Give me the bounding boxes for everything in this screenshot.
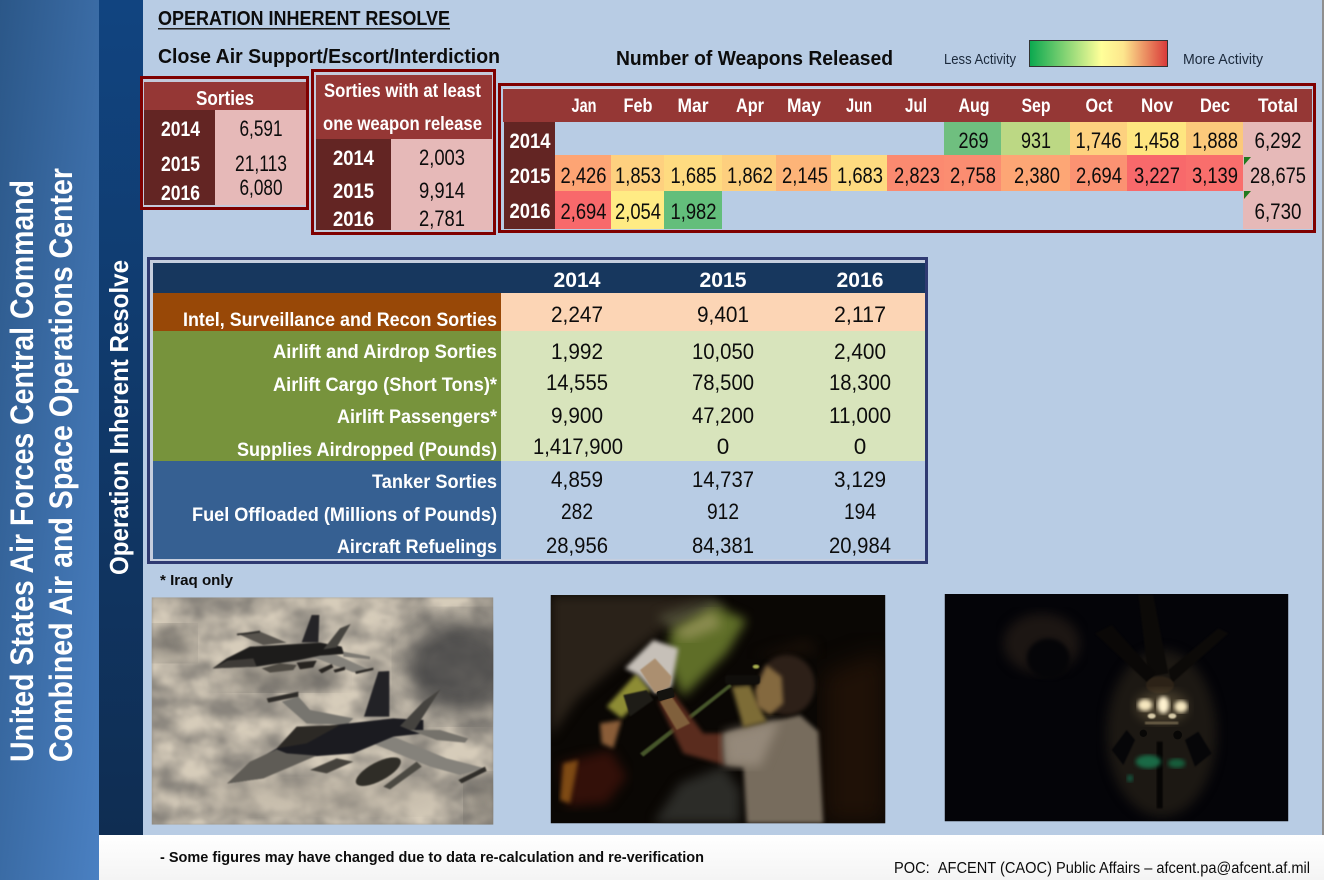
heat map 2015 row: 3,227 <box>1134 163 1180 188</box>
heat map year column: 2015 <box>510 164 551 188</box>
table header: 2014 <box>554 268 601 292</box>
heat map totals column: 28,675 <box>1250 163 1306 188</box>
panel: sorties with weapon release: 2,781 <box>419 206 465 231</box>
table section: airlift: 1,417,900 <box>533 434 623 459</box>
table section: tanker: 194 <box>844 499 876 524</box>
footnote: iraq only: * Iraq only <box>160 573 233 589</box>
panel: sorties: 21,113 <box>235 151 287 176</box>
panel: sorties: 6,080 <box>240 175 282 200</box>
table header <box>153 263 925 293</box>
heat map header: Oct <box>1086 95 1113 117</box>
heat map 2016 row: 1,982 <box>670 199 716 224</box>
panel: sorties with weapon release: 2,003 <box>419 145 465 170</box>
heat map header: Aug <box>958 95 990 117</box>
table section: airlift: Airlift Passengers* <box>337 406 497 428</box>
photo: fighter jets above clouds <box>147 597 517 830</box>
table section: airlift: 0 <box>854 434 866 459</box>
panel: sorties: 2014 <box>161 117 200 141</box>
heat map totals column: 6,292 <box>1254 128 1302 153</box>
flashlight <box>725 675 760 684</box>
heat map 2015 row <box>555 155 1243 191</box>
sidebar line 1: United States Air Forces Central Command <box>4 180 40 762</box>
panel: sorties: Sorties <box>196 87 254 110</box>
heading: close air support: Close Air Support/Escort/Interdiction <box>158 45 500 68</box>
heat map header: Dec <box>1200 95 1230 117</box>
table section: tanker <box>153 461 925 559</box>
panel: support sorties table <box>148 258 926 562</box>
heat map header: Feb <box>624 95 653 117</box>
table section: airlift: Airlift and Airdrop Sorties <box>273 341 497 363</box>
table section: intel: Intel, Surveillance and Recon Sorties <box>183 309 497 331</box>
table section: tanker: 28,956 <box>546 533 608 558</box>
panel: sorties: 6,591 <box>240 116 282 141</box>
heat map totals column <box>1243 122 1312 229</box>
legend low label: Less Activity <box>944 52 1017 68</box>
heat map 2016 row: 2,054 <box>615 199 661 224</box>
heat map 2014 row: 1,888 <box>1192 128 1238 153</box>
table section: airlift: 9,900 <box>551 403 603 428</box>
panel: sorties: 2015 <box>161 152 200 176</box>
heat map 2014 row: 1,746 <box>1076 128 1122 153</box>
panel: sorties with weapon release: 2014 <box>333 146 374 170</box>
table section: intel: 2,117 <box>834 302 886 327</box>
photo: aerial refueling at night <box>945 594 1288 821</box>
table section: tanker: 282 <box>561 499 593 524</box>
panel: sorties with weapon release: 9,914 <box>419 178 465 203</box>
table section: airlift: 47,200 <box>692 403 754 428</box>
heat map header: Nov <box>1141 95 1173 117</box>
panel: sorties with weapon release <box>312 70 494 234</box>
table section: airlift: 14,555 <box>546 370 608 395</box>
heat map totals column: 6,730 <box>1254 199 1302 224</box>
panel: sorties <box>142 78 308 208</box>
table section: tanker: Fuel Offloaded (Millions of Pounds) <box>192 504 497 526</box>
table section: airlift: Airlift Cargo (Short Tons)* <box>273 374 497 396</box>
table section: airlift: 11,000 <box>829 403 891 428</box>
panel: sorties with weapon release: 2016 <box>333 207 374 231</box>
heat map header: Jul <box>905 95 927 117</box>
footer note: - Some figures may have changed due to data re-calculation and re-verification <box>160 850 704 866</box>
table section: airlift: 1,992 <box>551 339 603 364</box>
table section: tanker: Aircraft Refuelings <box>337 536 497 558</box>
heat map header: Jun <box>846 95 872 117</box>
heat map 2015 row: 2,758 <box>950 163 996 188</box>
heat map header: May <box>787 95 821 117</box>
heat map header: Mar <box>678 95 709 117</box>
table section: intel: 2,247 <box>551 302 603 327</box>
panel: sorties with weapon release: 2015 <box>333 179 374 203</box>
heat map 2014 row <box>944 122 1243 155</box>
table section: airlift: Supplies Airdropped (Pounds) <box>237 439 497 461</box>
panel: sorties with weapon release: one weapon release <box>323 114 482 135</box>
heat map 2015 row: 2,426 <box>560 163 606 188</box>
heat map header <box>503 89 1312 122</box>
glove <box>625 640 678 693</box>
heat map header: Sep <box>1022 95 1051 117</box>
heat map 2015 row: 1,685 <box>670 163 716 188</box>
table section: tanker: 3,129 <box>834 467 886 492</box>
heading: weapons released: Number of Weapons Released <box>616 47 893 70</box>
jet: lower <box>227 671 487 792</box>
heat map year column <box>504 122 555 229</box>
title: OPERATION INHERENT RESOLVE <box>158 7 450 30</box>
table section: intel <box>153 293 925 331</box>
tanker aircraft underside <box>1107 650 1217 817</box>
heat map 2015 row: 2,380 <box>1014 163 1060 188</box>
head <box>758 655 815 715</box>
legend: activity scale <box>944 40 1264 68</box>
second sidebar: operation name <box>99 0 143 835</box>
table section: tanker: 20,984 <box>829 533 891 558</box>
sidebar line 2: Combined Air and Space Operations Center <box>43 168 79 762</box>
heat map 2015 row: 2,823 <box>894 163 940 188</box>
right edge strip <box>1322 0 1324 835</box>
legend gradient bar <box>1030 40 1168 66</box>
table section: airlift <box>153 331 925 461</box>
heat map year column: 2014 <box>510 129 551 153</box>
heat map 2016 row <box>555 191 722 229</box>
table section: airlift: 78,500 <box>692 370 754 395</box>
table section: tanker: Tanker Sorties <box>372 471 497 493</box>
heat map 2014 row: 269 <box>958 128 988 153</box>
legend high label: More Activity <box>1183 52 1264 68</box>
crew member arm raised <box>658 693 725 765</box>
point of contact: POC: AFCENT (CAOC) Public Affairs – afcent.pa@afcent.af.mil <box>894 860 1310 877</box>
heat map 2015 row: 1,683 <box>837 163 883 188</box>
table section: airlift: 0 <box>717 434 729 459</box>
footer band <box>99 835 1324 880</box>
green instrument glow <box>1136 755 1161 768</box>
forearm holding flashlight <box>732 685 767 727</box>
heat map 2015 row: 1,862 <box>727 163 773 188</box>
heat map 2016 row: 2,694 <box>560 199 606 224</box>
heat map 2015 row: 3,139 <box>1192 163 1238 188</box>
shirt <box>723 715 823 823</box>
insulation: green panel <box>668 607 747 697</box>
heat map 2014 row: 931 <box>1021 128 1051 153</box>
jet: upper <box>213 615 373 674</box>
panel: sorties with weapon release: Sorties with at least <box>324 81 482 102</box>
cockpit windows <box>1112 730 1135 765</box>
left sidebar: command names <box>0 0 99 880</box>
table section: airlift: 10,050 <box>692 339 754 364</box>
table header: 2015 <box>700 268 747 292</box>
lights <box>1135 690 1188 723</box>
table header: 2016 <box>836 268 884 292</box>
heat map 2015 row: 2,694 <box>1076 163 1122 188</box>
heat map 2015 row: 1,853 <box>615 163 661 188</box>
table section: intel: 9,401 <box>697 302 749 327</box>
table section: tanker: 84,381 <box>692 533 754 558</box>
table section: airlift: 18,300 <box>829 370 891 395</box>
table section: airlift: 2,400 <box>834 339 886 364</box>
heat map header: Jan <box>572 95 596 117</box>
table section: tanker: 4,859 <box>551 467 603 492</box>
heat map 2014 row: 1,458 <box>1134 128 1180 153</box>
heat map 2015 row: 2,145 <box>782 163 828 188</box>
refueling boom <box>1145 638 1168 676</box>
heat map year column: 2016 <box>510 199 551 223</box>
table section: tanker: 912 <box>707 499 739 524</box>
heat map header: Apr <box>736 95 764 117</box>
second sidebar: operation name: Operation Inherent Resolve <box>104 260 134 575</box>
photo: crew member with flashlight <box>551 595 885 823</box>
panel: sorties: 2016 <box>161 181 200 205</box>
panel: weapons released heat map <box>500 84 1314 232</box>
table section: tanker: 14,737 <box>692 467 754 492</box>
heat map header: Total <box>1258 95 1298 117</box>
lower left clutter <box>560 750 627 807</box>
